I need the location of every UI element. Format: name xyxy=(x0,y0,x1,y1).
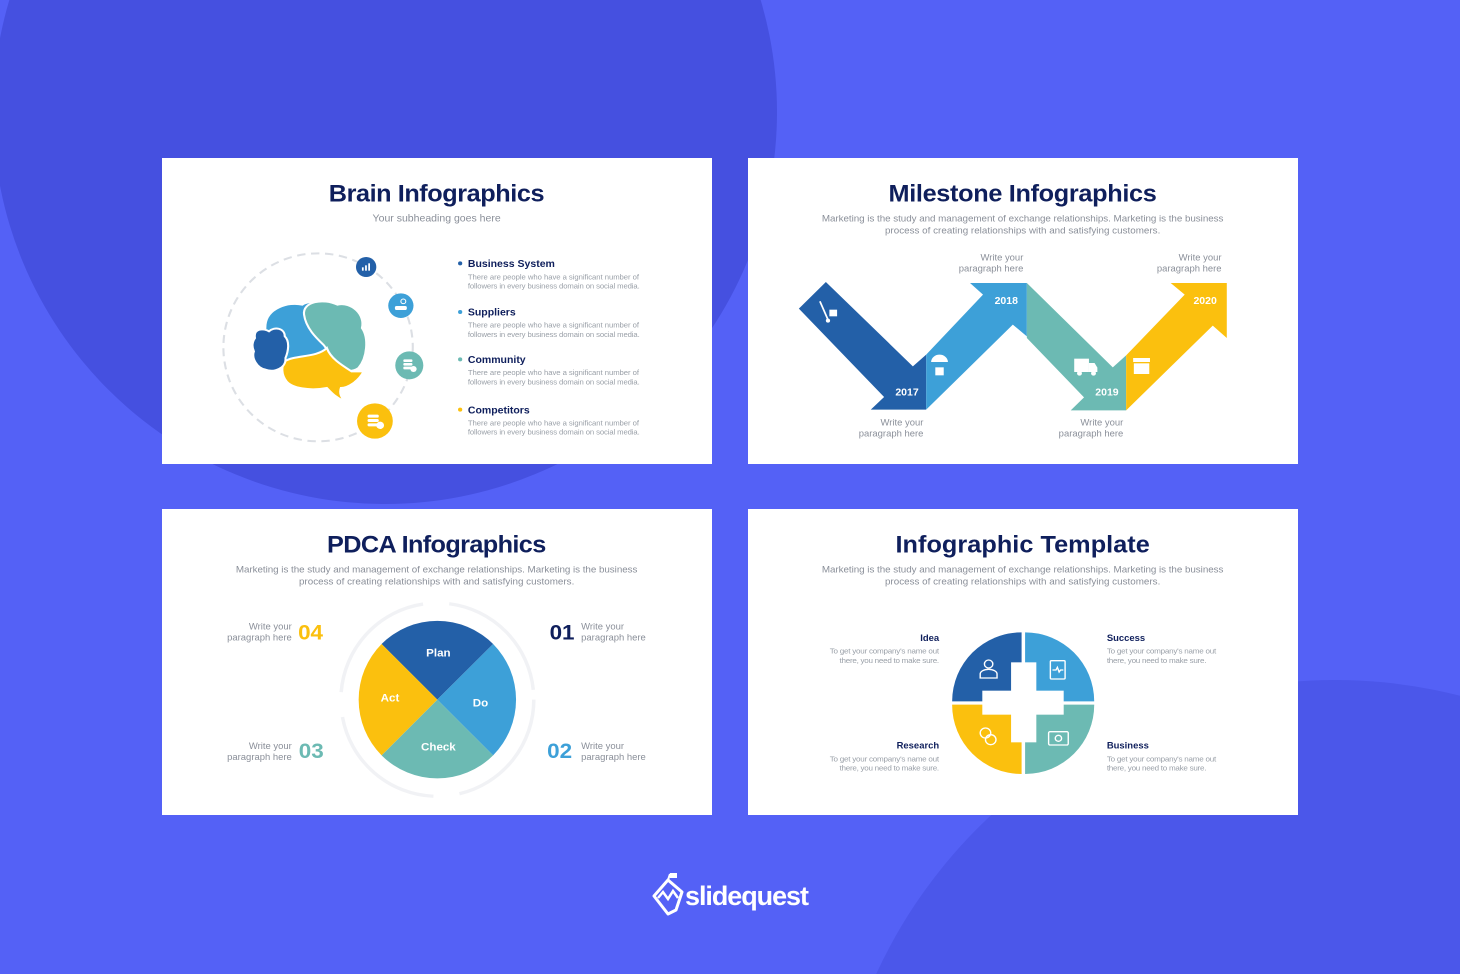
pie chart: Act xyxy=(381,693,400,704)
panel: infographic template: there, you need to make sure. xyxy=(840,764,939,773)
panel: PDCA infographics: paragraph here xyxy=(227,633,292,643)
list item: community: Community xyxy=(468,355,526,366)
step labels xyxy=(298,620,575,763)
panel: PDCA infographics: Write your xyxy=(581,741,624,751)
milestone captions: paragraph here xyxy=(1059,429,1123,439)
step labels: 02 xyxy=(547,739,572,763)
pie chart: Do xyxy=(473,698,488,709)
zigzag arrow timeline xyxy=(799,282,1227,410)
list item: business system: Business System xyxy=(468,259,555,270)
logo: slidequest: slidequest xyxy=(685,881,809,911)
subheading: Your subheading goes here xyxy=(373,214,501,224)
milestone captions xyxy=(859,253,1222,439)
panel: brain infographics xyxy=(162,158,712,464)
description xyxy=(822,214,1224,236)
panel: PDCA infographics xyxy=(162,509,712,815)
panel: infographic template: there, you need to make sure. xyxy=(1107,656,1206,665)
labels: Idea xyxy=(920,633,940,643)
panel: infographic template: To get your company's name out xyxy=(830,755,940,763)
labels: Success xyxy=(1107,633,1145,643)
panel: infographic template xyxy=(748,509,1298,815)
milestone captions: Write your xyxy=(880,418,923,428)
title: PDCA Infographics xyxy=(327,532,546,558)
logo: slidequest xyxy=(652,873,809,916)
panel: infographic template: To get your company's name out xyxy=(830,647,940,656)
description: Marketing is the study and management of exchange relationships. Marketing is the business xyxy=(822,214,1224,224)
labels xyxy=(897,633,1149,751)
panel: PDCA infographics: Write your xyxy=(581,622,624,632)
quadrant circle with cross xyxy=(952,632,1094,774)
description: process of creating relationships with and satisfying customers. xyxy=(885,577,1160,587)
panel: infographic template: there, you need to make sure. xyxy=(840,656,939,665)
pie chart xyxy=(359,621,516,778)
panel: PDCA infographics: paragraph here xyxy=(581,633,646,643)
list item: business system: There are people who have a significant number of xyxy=(468,273,640,281)
milestone captions: paragraph here xyxy=(1157,264,1222,274)
milestone captions: Write your xyxy=(1080,418,1123,428)
milestone captions: Write your xyxy=(1179,253,1222,263)
icon: chart xyxy=(356,257,376,277)
labels: Research xyxy=(897,741,940,751)
step labels: 03 xyxy=(299,739,324,763)
brain illustration xyxy=(253,301,366,401)
milestone captions: paragraph here xyxy=(859,429,923,439)
list item: suppliers: followers in every business domain on social media. xyxy=(468,330,640,339)
milestone captions: Write your xyxy=(980,253,1023,263)
icon: coins teal xyxy=(395,351,423,379)
pie chart: Plan xyxy=(426,648,451,660)
zigzag arrow timeline: 2018 xyxy=(995,296,1018,307)
description: Marketing is the study and management of exchange relationships. Marketing is the business xyxy=(822,565,1224,575)
panel: milestone infographics xyxy=(748,158,1298,464)
description: Marketing is the study and management of exchange relationships. Marketing is the business xyxy=(236,565,638,575)
list item: suppliers xyxy=(458,308,640,339)
icons xyxy=(829,310,837,316)
description xyxy=(236,565,638,587)
title: Brain Infographics xyxy=(329,181,545,207)
list item: competitors xyxy=(458,406,640,437)
description: process of creating relationships with and satisfying customers. xyxy=(885,226,1160,236)
labels: Business xyxy=(1107,741,1149,751)
panel: infographic template: To get your company's name out xyxy=(1107,647,1217,656)
panel: PDCA infographics: paragraph here xyxy=(227,752,292,762)
dashed ring xyxy=(223,253,413,441)
list item: competitors: Competitors xyxy=(468,406,530,416)
list item: business system xyxy=(458,259,640,291)
title: Infographic Template xyxy=(895,532,1150,558)
list item: community xyxy=(458,355,640,386)
zigzag arrow timeline: 2020 xyxy=(1193,296,1217,307)
panel: infographic template: To get your company's name out xyxy=(1107,755,1217,763)
description: process of creating relationships with and satisfying customers. xyxy=(299,577,574,587)
list item: community: There are people who have a significant number of xyxy=(468,368,640,377)
list item: community: followers in every business domain on social media. xyxy=(468,378,640,386)
list item: suppliers: Suppliers xyxy=(468,308,516,319)
panel: PDCA infographics: Write your xyxy=(249,622,292,632)
zigzag arrow timeline: 2019 xyxy=(1095,388,1119,398)
pie chart: Check xyxy=(421,742,456,753)
title: Milestone Infographics xyxy=(888,181,1157,207)
step labels: 04 xyxy=(298,620,324,645)
panel: PDCA infographics: paragraph here xyxy=(581,752,646,762)
description xyxy=(822,565,1224,587)
list item: competitors: There are people who have a significant number of xyxy=(468,419,640,427)
panel: PDCA infographics: Write your xyxy=(249,741,292,751)
panel: infographic template: there, you need to make sure. xyxy=(1107,764,1206,773)
list item: business system: followers in every business domain on social media. xyxy=(468,282,640,291)
icon: coins yellow xyxy=(357,403,393,439)
cycle arrows ring xyxy=(341,603,534,796)
list item: competitors: followers in every business domain on social media. xyxy=(468,428,640,437)
zigzag arrow timeline: 2017 xyxy=(895,388,919,398)
milestone captions: paragraph here xyxy=(959,264,1023,274)
icon: hand coin xyxy=(388,293,413,318)
step labels: 01 xyxy=(550,620,575,645)
list item: suppliers: There are people who have a significant number of xyxy=(468,321,640,330)
